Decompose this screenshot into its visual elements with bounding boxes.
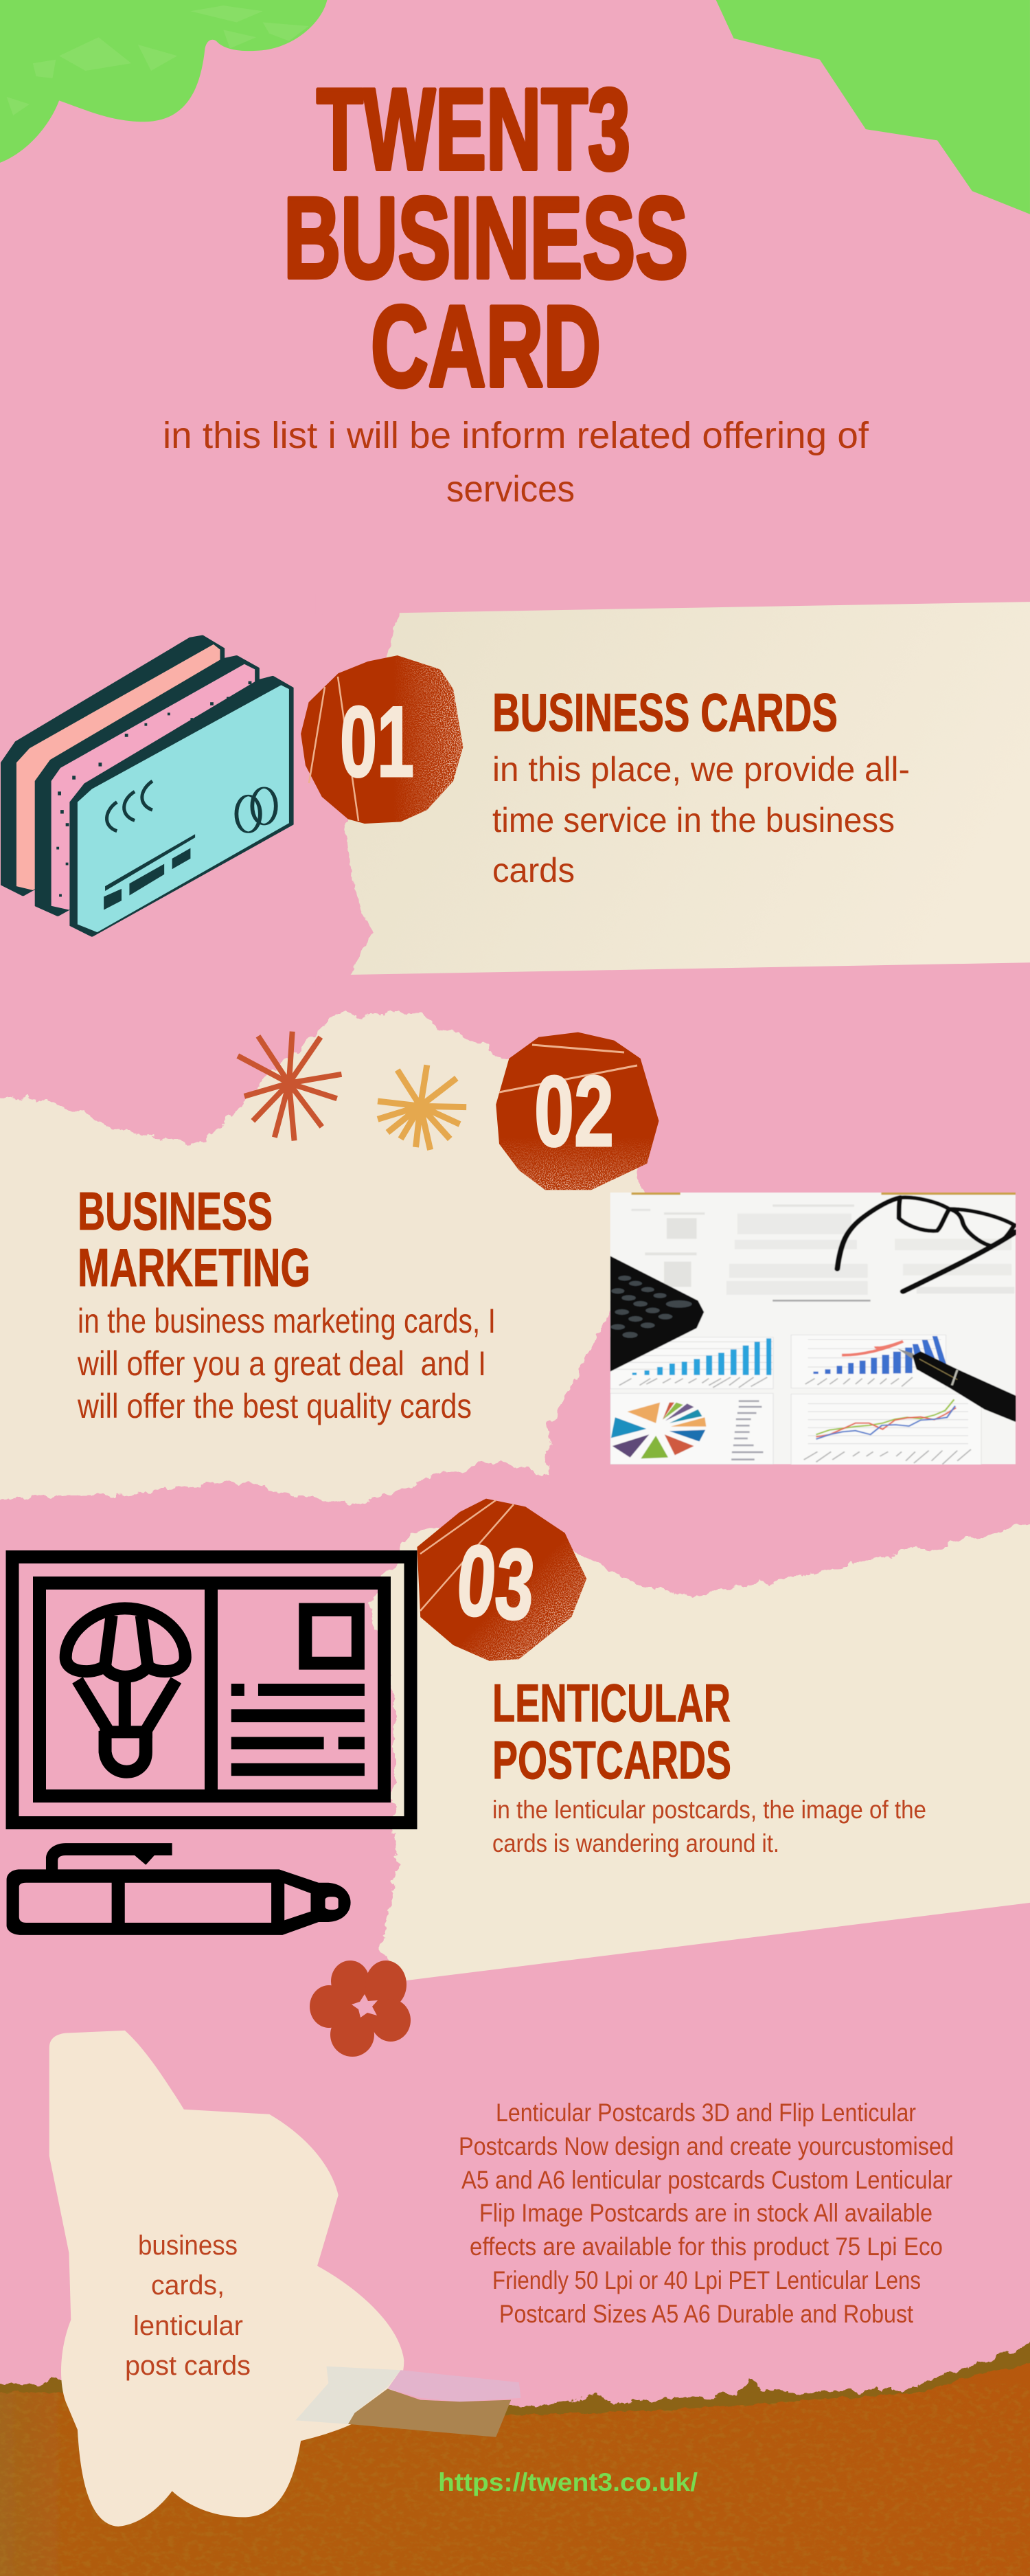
text: blob label: business	[138, 2230, 238, 2261]
number badge 03	[417, 1499, 586, 1661]
glasses	[837, 1197, 1016, 1291]
pie legend	[731, 1400, 763, 1460]
text: lenticular description: Flip Image Postcards are in stock All available	[479, 2199, 932, 2227]
text: lenticular description: effects are available for this product 75 Lpi Eco	[470, 2233, 943, 2261]
line chart	[816, 1399, 956, 1439]
washi tape	[295, 2366, 521, 2437]
text: business cards body: cards	[492, 851, 575, 890]
heading: business marketing: BUSINESS	[78, 1181, 273, 1241]
title: TWENT3	[317, 65, 630, 194]
text: blob label: cards,	[151, 2270, 225, 2301]
text: lenticular postcards body: cards is wandering around it.	[492, 1829, 779, 1857]
photo: charts, calculator, glasses and pen	[610, 1193, 1016, 1465]
blue bars two	[814, 1336, 946, 1374]
icon: flower	[310, 1961, 411, 2057]
subtitle	[163, 415, 869, 510]
title: CARD	[371, 282, 601, 411]
card stripe and code blocks	[104, 834, 195, 910]
x axis labels	[619, 1377, 971, 1465]
panel: business marketing torn paper	[0, 1013, 647, 1507]
text: business marketing body	[77, 1302, 496, 1425]
heading: business cards: BUSINESS CARDS	[492, 682, 838, 743]
number badge 02: 02	[534, 1055, 614, 1167]
text: business cards body: time service in the business	[492, 801, 895, 839]
panel: business cards torn paper	[345, 596, 1030, 981]
heading: lenticular postcards: POSTCARDS	[492, 1730, 731, 1790]
text: blob label: lenticular	[133, 2311, 243, 2341]
heading: lenticular postcards	[492, 1673, 731, 1790]
text: business marketing body: will offer the best quality cards	[77, 1387, 472, 1425]
subtitle: in this list i will be inform related offering of	[163, 415, 869, 456]
number badge 01: 01	[340, 686, 414, 798]
green blob top left	[0, 0, 327, 163]
text: lenticular description: Friendly 50 Lpi or 40 Lpi PET Lenticular Lens	[492, 2266, 921, 2294]
icon: pen	[7, 1843, 351, 1935]
calculator	[610, 1256, 704, 1372]
text: lenticular description	[459, 2099, 954, 2328]
icon: postcard	[12, 1557, 411, 1823]
heading: lenticular postcards: LENTICULAR	[492, 1673, 731, 1733]
text: lenticular description: Postcards Now design and create yourcustomised	[459, 2132, 954, 2160]
text: business cards body	[492, 750, 910, 890]
stamp and address lines	[231, 1603, 365, 1776]
panel: lenticular postcards torn paper	[368, 1514, 1030, 1992]
text: lenticular description: Lenticular Postcards 3D and Flip Lenticular	[496, 2099, 916, 2127]
text: business cards body: in this place, we provide all-	[492, 750, 910, 789]
tables	[632, 1204, 1014, 1295]
text: lenticular description: A5 and A6 lenticular postcards Custom Lenticular	[461, 2166, 952, 2194]
chart papers	[610, 1335, 981, 1465]
blue bars one	[632, 1338, 771, 1375]
torn brown paper footer	[0, 2327, 1030, 2576]
number badge 01	[301, 655, 463, 824]
text: lenticular description: Postcard Sizes A5 A6 Durable and Robust	[499, 2300, 914, 2328]
card logo rings	[236, 788, 276, 833]
heading: business marketing: MARKETING	[78, 1237, 310, 1298]
red arrow mark	[842, 1342, 903, 1355]
text: business marketing body: in the business marketing cards, I	[78, 1302, 496, 1340]
decorative burst: orange	[378, 1065, 466, 1150]
card chip marks	[107, 781, 152, 831]
heading: business marketing	[78, 1181, 310, 1298]
text: blob label: post cards	[125, 2351, 251, 2381]
number badge 03: 03	[453, 1524, 539, 1642]
pie chart	[628, 1403, 660, 1423]
text: blob label	[125, 2230, 251, 2381]
title: BUSINESS	[284, 173, 688, 302]
text: lenticular postcards body	[492, 1796, 926, 1857]
link: website url: https://twent3.co.uk/	[438, 2468, 698, 2496]
brown paper main sheet	[0, 2355, 1030, 2576]
brown paper dark torn edge	[0, 2327, 1030, 2576]
text: lenticular postcards body: in the lenticular postcards, the image of the	[492, 1796, 926, 1824]
icon: stack of cards	[2, 635, 293, 936]
decorative burst: red	[238, 1032, 341, 1140]
pen	[897, 1348, 914, 1359]
icon: hot air balloon	[66, 1608, 185, 1772]
title	[284, 65, 688, 411]
blob: cream shape	[49, 2031, 404, 2527]
subtitle: services	[446, 468, 575, 510]
green shape top right	[716, 0, 1030, 214]
number badge 02	[496, 1032, 659, 1190]
text: business marketing body: will offer you a great deal and I	[77, 1344, 486, 1383]
